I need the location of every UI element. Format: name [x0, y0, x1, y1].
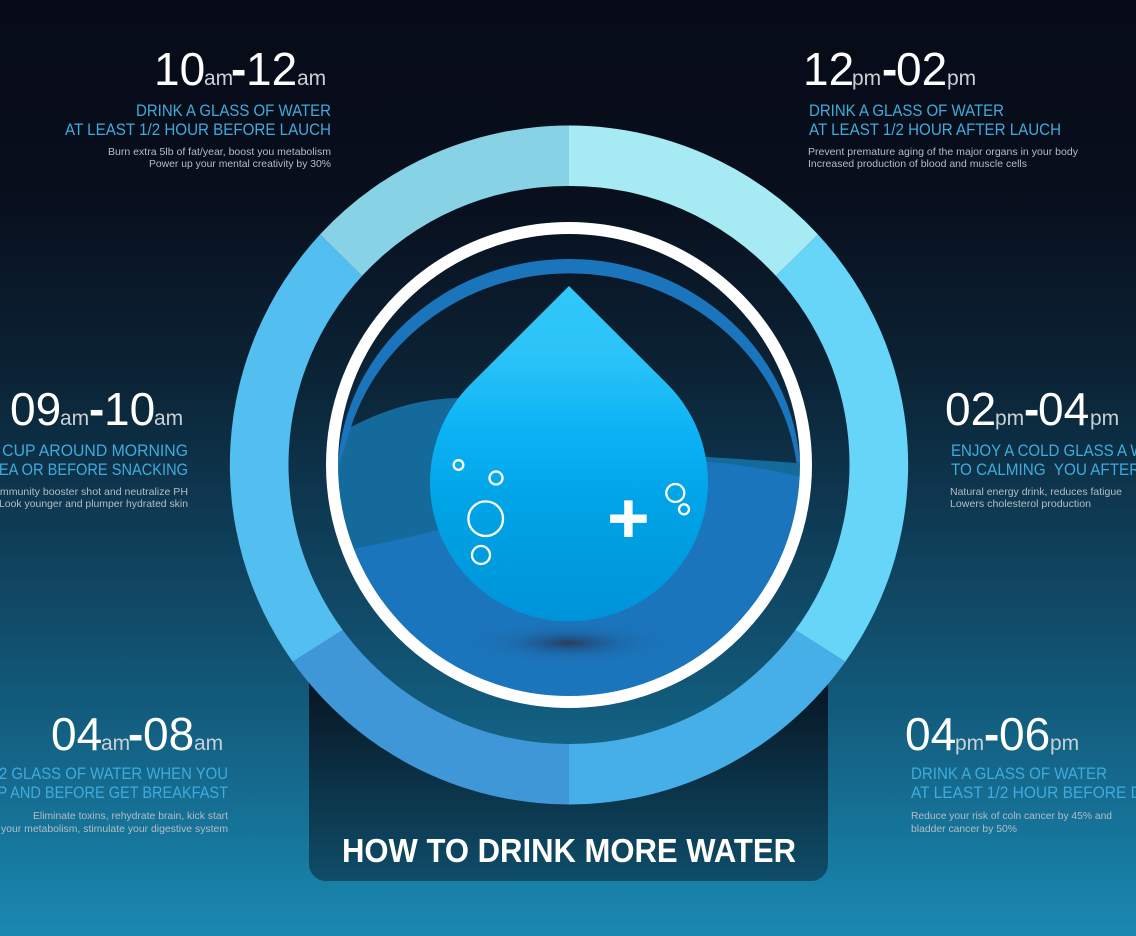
text block: 10am-12am [65, 43, 331, 170]
time: pm [1090, 407, 1119, 430]
heading: DRINK A GLASS OF WATER [911, 764, 1107, 783]
time: - [231, 43, 246, 95]
description: Burn extra 5lb of fat/year, boost you metabolism [108, 146, 331, 158]
ring segment: 04pm-06pm [569, 630, 845, 804]
time: am [194, 732, 223, 755]
text block: 04am-08am [0, 708, 228, 835]
time: 09 [10, 383, 61, 435]
water body [330, 250, 810, 700]
time: pm [947, 67, 976, 90]
time: 02 [945, 383, 996, 435]
dark sky [351, 273, 796, 463]
text block: 02pm-04pm: Lowers cholesterol production [950, 498, 1091, 510]
circular clock graphic [230, 126, 908, 804]
time: pm [1050, 732, 1079, 755]
time: 12 [246, 43, 297, 95]
description: Eliminate toxins, rehydrate brain, kick start [33, 810, 228, 822]
time: - [1024, 383, 1039, 435]
time: 02 [896, 43, 947, 95]
text block: 04pm-06pm: bladder cancer by 50% [911, 823, 1017, 835]
text block: 04pm-06pm [905, 708, 1136, 835]
time: - [128, 708, 143, 760]
time: 04 [905, 708, 956, 760]
text block: 12pm-02pm: Increased production of blood and muscle cells [808, 158, 1027, 170]
time: - [882, 43, 897, 95]
icon: plus [610, 500, 647, 537]
ring segment: 04am-08am [293, 630, 569, 804]
teal back wave [338, 398, 800, 548]
time: 10 [154, 43, 205, 95]
time: - [984, 708, 999, 760]
blue water [330, 250, 810, 700]
time: pm [955, 732, 984, 755]
time: am [204, 67, 233, 90]
time: 06 [999, 708, 1050, 760]
time: 08 [143, 708, 194, 760]
time: pm [995, 407, 1024, 430]
ring segment: 09am-10am [230, 234, 362, 662]
time: 04 [51, 708, 102, 760]
description: Natural energy drink, reduces fatigue [950, 486, 1122, 498]
disc behind ring [230, 126, 908, 804]
description: Prevent premature aging of the major organs in your body [808, 146, 1079, 158]
time: am [101, 732, 130, 755]
heading: DRINK A GLASS OF WATER [136, 101, 331, 120]
ring segment: 02pm-04pm [776, 234, 908, 662]
ring segment: 12pm-02pm [569, 126, 818, 276]
text block: 09am-10am [0, 383, 188, 510]
drop shadow [454, 619, 684, 667]
time: pm [852, 67, 881, 90]
time: am [154, 407, 183, 430]
time: 04 [1038, 383, 1089, 435]
text block: 02pm-04pm [945, 383, 1136, 510]
text block: 09am-10am: Look younger and plumper hydrated skin [0, 498, 188, 510]
time: 12 [803, 43, 854, 95]
time: 10 [104, 383, 155, 435]
time: am [60, 407, 89, 430]
panel: title plate [309, 640, 828, 881]
white ring [332, 228, 806, 702]
time: - [89, 383, 104, 435]
time: am [297, 67, 326, 90]
description: Immunity booster shot and neutralize PH [0, 486, 188, 498]
description: Reduce your risk of coln cancer by 45% and [911, 810, 1112, 822]
text block: 10am-12am: Power up your mental creativity by 30% [149, 158, 331, 170]
heading: DRINK A GLASS OF WATER [809, 101, 1004, 120]
title: HOW TO DRINK MORE WATER [342, 832, 796, 869]
icon: water drop [430, 286, 708, 621]
text block: 04am-08am: your metabolism, stimulate your digestive system [1, 823, 228, 835]
heading: 2 GLASS OF WATER WHEN YOU [0, 764, 228, 783]
text block: 10am-12am: AT LEAST 1/2 HOUR BEFORE LAUCH [65, 120, 331, 139]
ring segment: 10am-12am [320, 126, 569, 276]
bubbles [454, 460, 689, 564]
text block: 12pm-02pm: AT LEAST 1/2 HOUR AFTER LAUCH [809, 120, 1061, 139]
text block: 12pm-02pm [803, 43, 1079, 170]
